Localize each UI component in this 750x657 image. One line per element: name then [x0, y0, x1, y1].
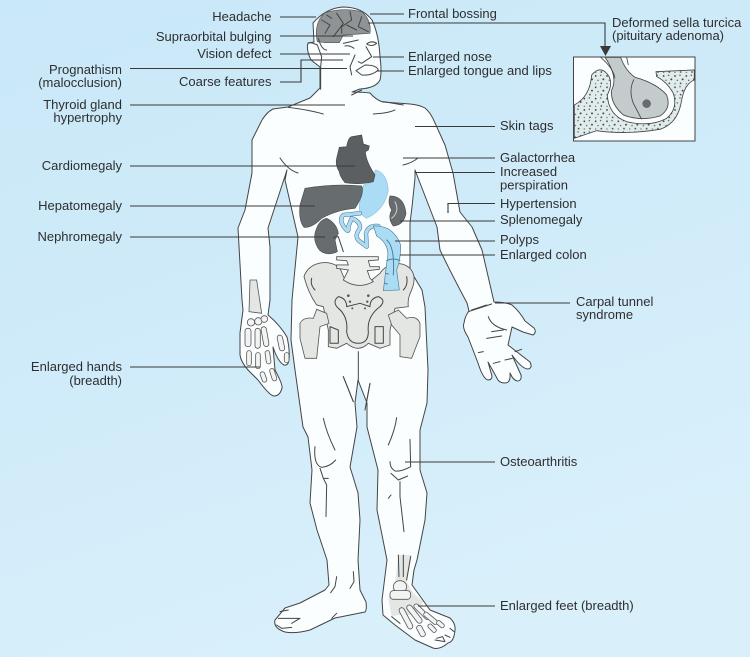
label: Coarse features: Coarse features [179, 74, 272, 89]
label: Polyps: Polyps [500, 232, 540, 247]
crotch lines [343, 352, 370, 410]
icon: heart [336, 135, 375, 184]
head details [288, 10, 403, 114]
label: Skin tags: Skin tags [500, 118, 554, 133]
label: Enlarged feet: Enlarged feet (breadth) [500, 598, 634, 613]
label: Cardiomegaly: Cardiomegaly [42, 158, 122, 173]
leader lines [130, 14, 605, 606]
icon: spleen [389, 196, 406, 226]
pelvis details [311, 277, 407, 343]
icon: small intestine [341, 213, 378, 247]
label: Galactorrhea: Galactorrhea [500, 150, 576, 165]
label: Increased perspiration: Increased [500, 164, 557, 179]
feet [277, 555, 454, 642]
icon: foot bones [388, 555, 423, 617]
icon: left hand bones [245, 280, 289, 383]
label: Prognathism: Prognathism [49, 62, 122, 77]
icon: brain [316, 10, 370, 43]
inset: deformed sella turcica [574, 57, 695, 141]
right hand creases [468, 304, 522, 363]
label: Deformed sella turcica: (pituitary adenoma) [612, 28, 724, 43]
label: Splenomegaly: Splenomegaly [500, 212, 583, 227]
body silhouette [238, 7, 535, 648]
label: Enlarged hands: Enlarged hands [31, 359, 122, 374]
label: Frontal bossing: Frontal bossing [408, 6, 497, 21]
label: Hypertension: Hypertension [500, 196, 577, 211]
label: Nephromegaly: Nephromegaly [37, 229, 122, 244]
icon: spine [337, 257, 379, 285]
toes and ankle lines [277, 572, 454, 642]
label: Supraorbital bulging: Supraorbital bulging [156, 29, 272, 44]
label: Deformed sella turcica: Deformed sella turcica [612, 15, 742, 30]
femurs and hands [245, 280, 522, 410]
label: Increased perspiration: perspiration [500, 178, 568, 192]
icon: stomach [359, 170, 388, 218]
internal organs [300, 135, 414, 348]
label: Hepatomegaly: Hepatomegaly [38, 198, 122, 213]
label: Enlarged colon: Enlarged colon [500, 247, 587, 262]
knee details [315, 377, 411, 532]
arrow to inset [600, 46, 611, 56]
icon: left femur [300, 309, 329, 358]
icon: pelvis [304, 263, 414, 348]
label: Enlarged tongue and lips: Enlarged tongue and lips [408, 63, 552, 78]
bone [574, 70, 694, 138]
label: Carpal tunnel syndrome: Carpal tunnel [576, 294, 653, 309]
face lines [288, 38, 403, 114]
label: Carpal tunnel syndrome: syndrome [576, 307, 633, 322]
torso creases [280, 158, 418, 173]
labels right [408, 6, 742, 613]
label: Enlarged hands: (breadth) [69, 373, 122, 388]
label: Enlarged nose: Enlarged nose [408, 49, 492, 64]
label: Prognathism: (malocclusion) [38, 75, 122, 90]
label: Osteoarthritis: Osteoarthritis [500, 454, 578, 469]
icon: right kidney [315, 218, 338, 254]
icon: right femur [388, 310, 420, 358]
icon: enlarged colon [373, 226, 401, 291]
label: Vision defect: Vision defect [197, 46, 272, 61]
gland [605, 57, 668, 119]
label: Thyroid gland hypertrophy: hypertrophy [53, 110, 122, 125]
label: Headache: Headache [212, 9, 272, 24]
labels left [31, 9, 272, 388]
label: Thyroid gland hypertrophy: Thyroid gland [43, 97, 122, 112]
icon: liver [300, 185, 362, 227]
